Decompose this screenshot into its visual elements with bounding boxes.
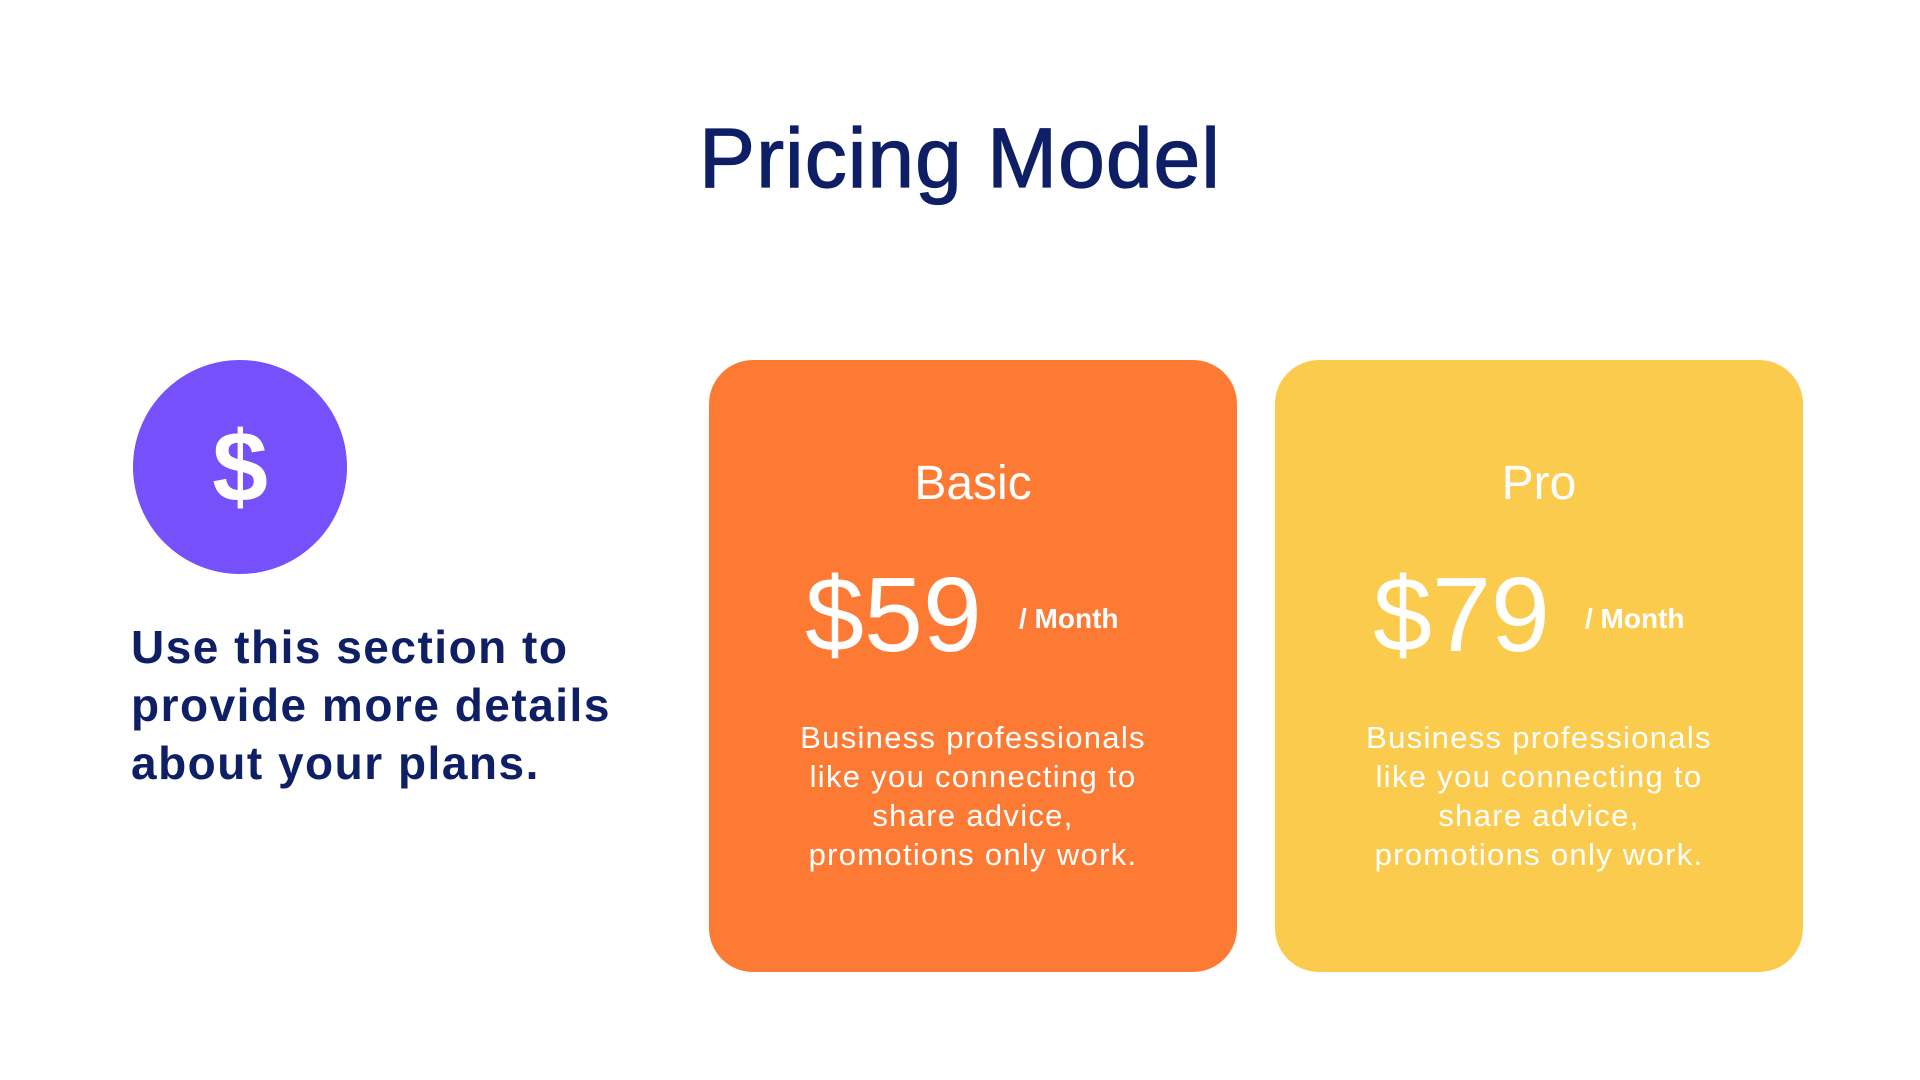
icon: dollar circle	[133, 360, 347, 574]
text block: left description: provide more details	[131, 679, 611, 731]
text: basic description: promotions only work.	[809, 837, 1137, 872]
price: basic: / Month	[1019, 603, 1119, 634]
price: pro: $79	[1373, 556, 1550, 674]
text: basic description	[800, 720, 1146, 872]
price: pro: / Month	[1585, 603, 1685, 634]
text: pro description	[1366, 720, 1712, 872]
text: basic description: like you connecting to	[810, 759, 1136, 794]
heading: basic: Basic	[914, 457, 1032, 510]
text block: left description: Use this section to	[131, 621, 568, 673]
panel: basic plan	[709, 360, 1237, 972]
panel: pro plan	[1275, 360, 1803, 972]
price: pro	[1373, 556, 1685, 674]
text: basic description: Business professionals	[800, 720, 1146, 755]
title: Pricing Model	[699, 111, 1221, 205]
icon: dollar circle: $	[212, 411, 268, 523]
text: pro description: like you connecting to	[1376, 759, 1702, 794]
text: pro description: Business professionals	[1366, 720, 1712, 755]
text: pro description: promotions only work.	[1375, 837, 1703, 872]
text: basic description: share advice,	[872, 798, 1074, 833]
text: pro description: share advice,	[1438, 798, 1640, 833]
price: basic: $59	[805, 556, 982, 674]
price: basic	[805, 556, 1119, 674]
text block: left description	[131, 621, 611, 789]
text block: left description: about your plans.	[131, 737, 540, 789]
heading: pro: Pro	[1502, 457, 1576, 510]
